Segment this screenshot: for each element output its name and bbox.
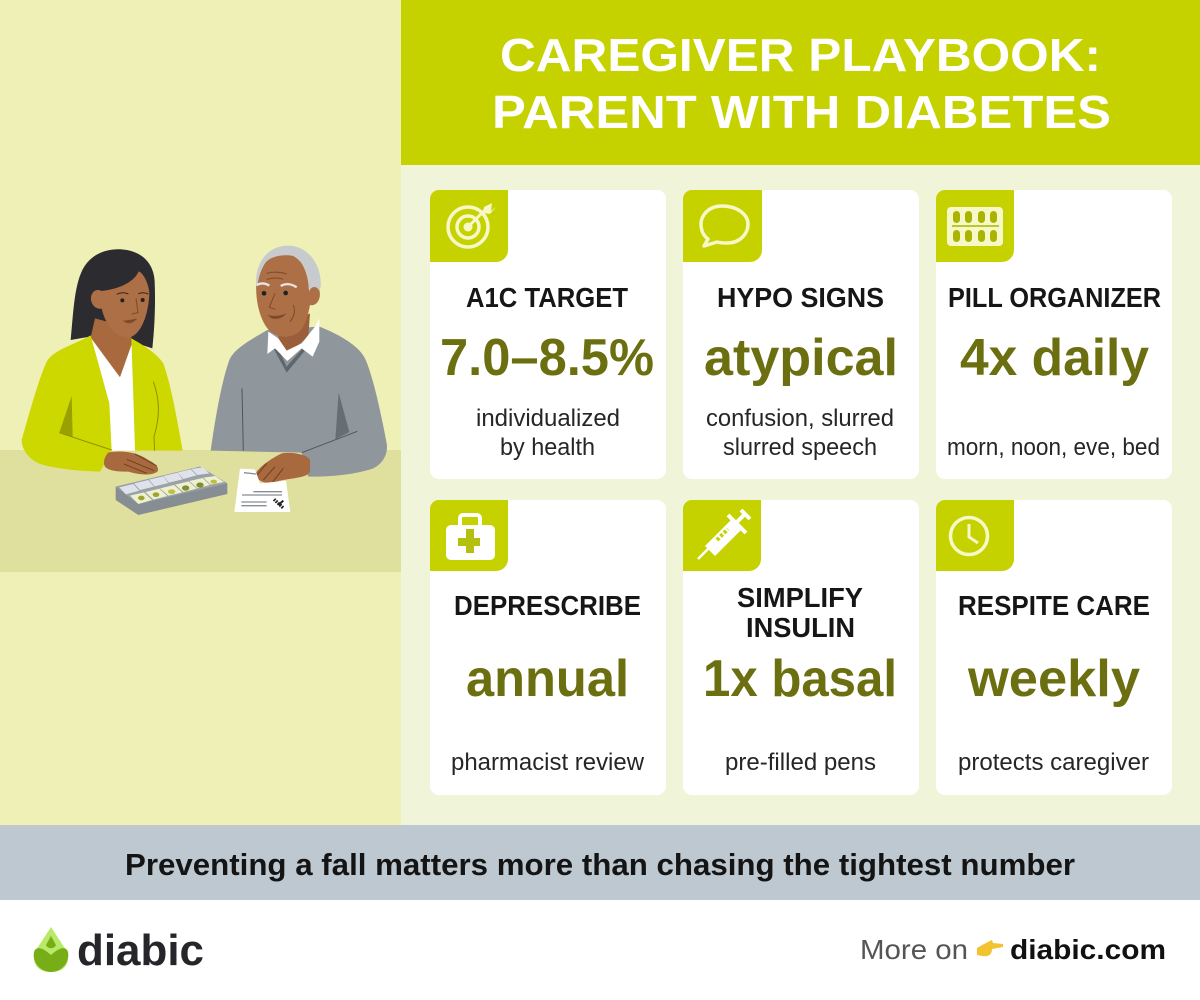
card: deprescribe: pharmacist review xyxy=(451,749,645,776)
title banner: PARENT WITH DIABETES xyxy=(492,86,1111,138)
card: deprescribe: DEPRESCRIBE xyxy=(454,590,641,621)
icon: pill blister pack xyxy=(936,190,1014,262)
prescription paper xyxy=(234,469,290,512)
link: more on diabic.com xyxy=(860,934,1166,965)
card: respite care: RESPITE CARE xyxy=(958,590,1150,621)
card: A1C target: A1C TARGET xyxy=(466,282,628,313)
woman caregiver xyxy=(22,249,183,475)
card: simplify insulin: 1x basal xyxy=(703,650,897,708)
icon: target xyxy=(430,190,508,262)
icon: speech bubble xyxy=(683,190,762,262)
table xyxy=(0,450,401,572)
title banner: CAREGIVER PLAYBOOK: xyxy=(500,29,1101,81)
card: hypo signs: confusion, slurred xyxy=(706,405,894,432)
icon: first aid kit xyxy=(430,500,508,571)
logo: diabic: diabic xyxy=(77,926,204,975)
card: hypo signs: HYPO SIGNS xyxy=(717,282,884,313)
card: A1C target: individualized xyxy=(476,405,620,432)
card: A1C target xyxy=(430,190,666,479)
card: pill organizer: morn, noon, eve, bed xyxy=(947,434,1160,461)
title banner xyxy=(401,0,1200,165)
takeaway banner: Preventing a fall matters more than chasing the tightest number xyxy=(125,847,1075,882)
icon: clock xyxy=(936,500,1014,571)
card: respite care: protects caregiver xyxy=(958,749,1149,776)
card: hypo signs: slurred speech xyxy=(723,434,877,461)
elderly parent xyxy=(211,246,387,483)
card: pill organizer: PILL ORGANIZER xyxy=(948,282,1161,313)
panel: illustration background xyxy=(0,0,401,825)
card: simplify insulin: SIMPLIFY xyxy=(737,582,863,613)
card: simplify insulin: pre-filled pens xyxy=(725,749,876,776)
card: deprescribe: annual xyxy=(466,650,629,708)
pill organizer xyxy=(116,467,227,515)
card: hypo signs xyxy=(683,190,919,479)
card: A1C target: by health xyxy=(500,434,595,461)
card: pill organizer: 4x daily xyxy=(960,329,1149,387)
card: simplify insulin: INSULIN xyxy=(746,612,855,643)
card: hypo signs: atypical xyxy=(704,329,898,387)
takeaway banner xyxy=(0,825,1200,900)
icon: drop logo xyxy=(34,927,68,972)
illustration: caregiver and parent at table xyxy=(0,246,401,572)
link: more on diabic.com: diabic.com xyxy=(1010,934,1166,965)
card: A1C target: 7.0–8.5% xyxy=(440,329,654,387)
card: pill organizer xyxy=(936,190,1172,479)
card: simplify insulin xyxy=(683,500,919,795)
icon: syringe xyxy=(683,500,761,571)
card: respite care: weekly xyxy=(967,650,1140,708)
icon: pointing hand xyxy=(977,940,1003,956)
link: more on diabic.com: More on xyxy=(860,934,968,965)
card: deprescribe xyxy=(430,500,666,795)
card: respite care xyxy=(936,500,1172,795)
panel: cards background xyxy=(401,165,1200,825)
